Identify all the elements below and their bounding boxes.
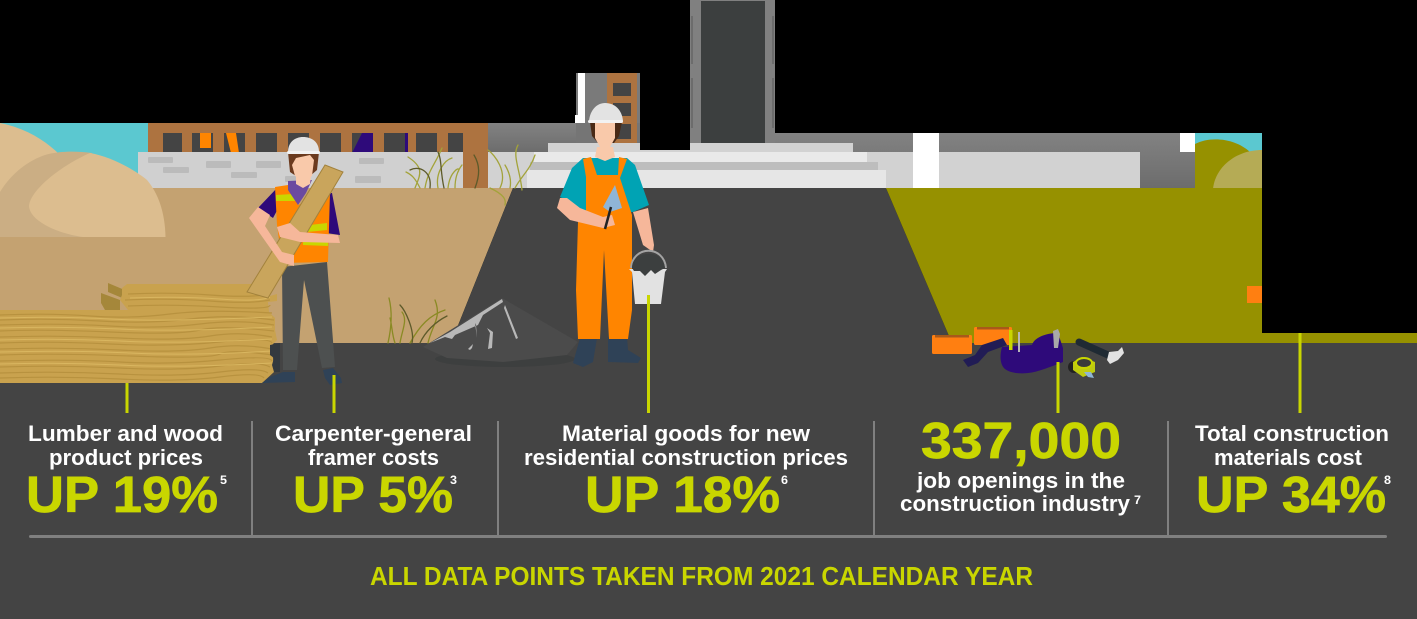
icon: cement pile — [423, 298, 578, 367]
carpenter neck — [296, 176, 311, 188]
carpenter face — [292, 155, 314, 181]
mason overalls — [576, 157, 632, 339]
stat: lumber: product prices — [49, 445, 203, 470]
stat: job openings: 337,000 — [921, 412, 1121, 469]
footnote heading: ALL DATA POINTS TAKEN FROM 2021 CALENDAR YEAR — [370, 561, 1033, 591]
icon: tool belt — [963, 329, 1063, 373]
mason shirt — [560, 158, 649, 212]
carpenter hi-vis stripes — [276, 194, 328, 246]
icon: lumber stack — [0, 283, 280, 383]
stat: carpenter: UP 5% — [293, 466, 453, 523]
carpenter hard hat — [287, 137, 320, 154]
stat: job openings: construction industry — [900, 491, 1131, 516]
scene: left sand hills — [0, 123, 166, 237]
figure: mason with bucket — [557, 103, 667, 367]
stat: lumber: UP 19% — [26, 466, 218, 523]
mason bucket — [629, 251, 667, 304]
mason trowel — [603, 185, 622, 229]
black top right block — [775, 0, 1417, 133]
carpenter shirt — [258, 188, 340, 235]
stat: carpenter — [275, 421, 472, 523]
stat: carpenter: Carpenter-general — [275, 421, 472, 446]
stat: total materials: UP 34% — [1196, 466, 1386, 523]
carpenter legs — [282, 262, 335, 370]
scene: tan ground — [0, 188, 513, 343]
icon: tape measure — [1068, 357, 1095, 378]
stat: lumber — [26, 421, 227, 523]
stat: total materials: Total construction — [1195, 421, 1389, 446]
mason arms — [557, 198, 654, 252]
scene: olive ground — [886, 188, 1417, 343]
mason boots — [573, 337, 641, 367]
stat: job openings — [900, 412, 1141, 516]
stat: lumber: Lumber and wood — [28, 421, 223, 446]
stat: material goods: 6 — [781, 473, 788, 487]
icon: hammer — [1079, 342, 1124, 364]
icon: grass tufts — [388, 145, 535, 343]
icon: bricks — [932, 286, 1262, 354]
scene: dark road — [0, 343, 1417, 619]
mason neck and face — [595, 122, 615, 161]
stat: total materials — [1195, 421, 1391, 523]
scene: left sky — [0, 123, 150, 193]
black mask block over centre — [640, 0, 690, 150]
carpenter plank — [247, 165, 343, 298]
carpenter vest — [275, 185, 330, 263]
scene: front steps — [527, 143, 886, 188]
scene: right hills — [1195, 133, 1262, 189]
black corner block — [1262, 0, 1417, 333]
stat: carpenter: framer costs — [308, 445, 439, 470]
carpenter arms — [249, 207, 340, 266]
stat: material goods: UP 18% — [585, 466, 780, 523]
scene: brown fence and brick wall — [138, 123, 488, 188]
stat: job openings: 7 — [1134, 493, 1141, 507]
stat: job openings: job openings in the — [916, 468, 1125, 493]
carpenter hair — [288, 152, 319, 176]
stat: material goods — [524, 421, 848, 523]
stat: material goods: Material goods for new — [562, 421, 811, 446]
column dividers and rule — [29, 421, 1387, 538]
stat: material goods: residential construction prices — [524, 445, 848, 470]
callout leader lines — [126, 295, 1302, 413]
figure: carpenter with plank — [247, 137, 343, 385]
mason hard hat — [588, 103, 623, 123]
mason hair — [590, 122, 622, 143]
stat: lumber: 5 — [220, 473, 227, 487]
carpenter boots — [262, 368, 342, 385]
stat: carpenter: 3 — [450, 473, 457, 487]
scene: road centre — [451, 188, 952, 343]
carpenter collar — [288, 180, 312, 205]
scene: rear building wall — [488, 73, 1195, 189]
stat: total materials: materials cost — [1214, 445, 1363, 470]
stat: total materials: 8 — [1384, 473, 1391, 487]
scene: door — [690, 0, 775, 144]
